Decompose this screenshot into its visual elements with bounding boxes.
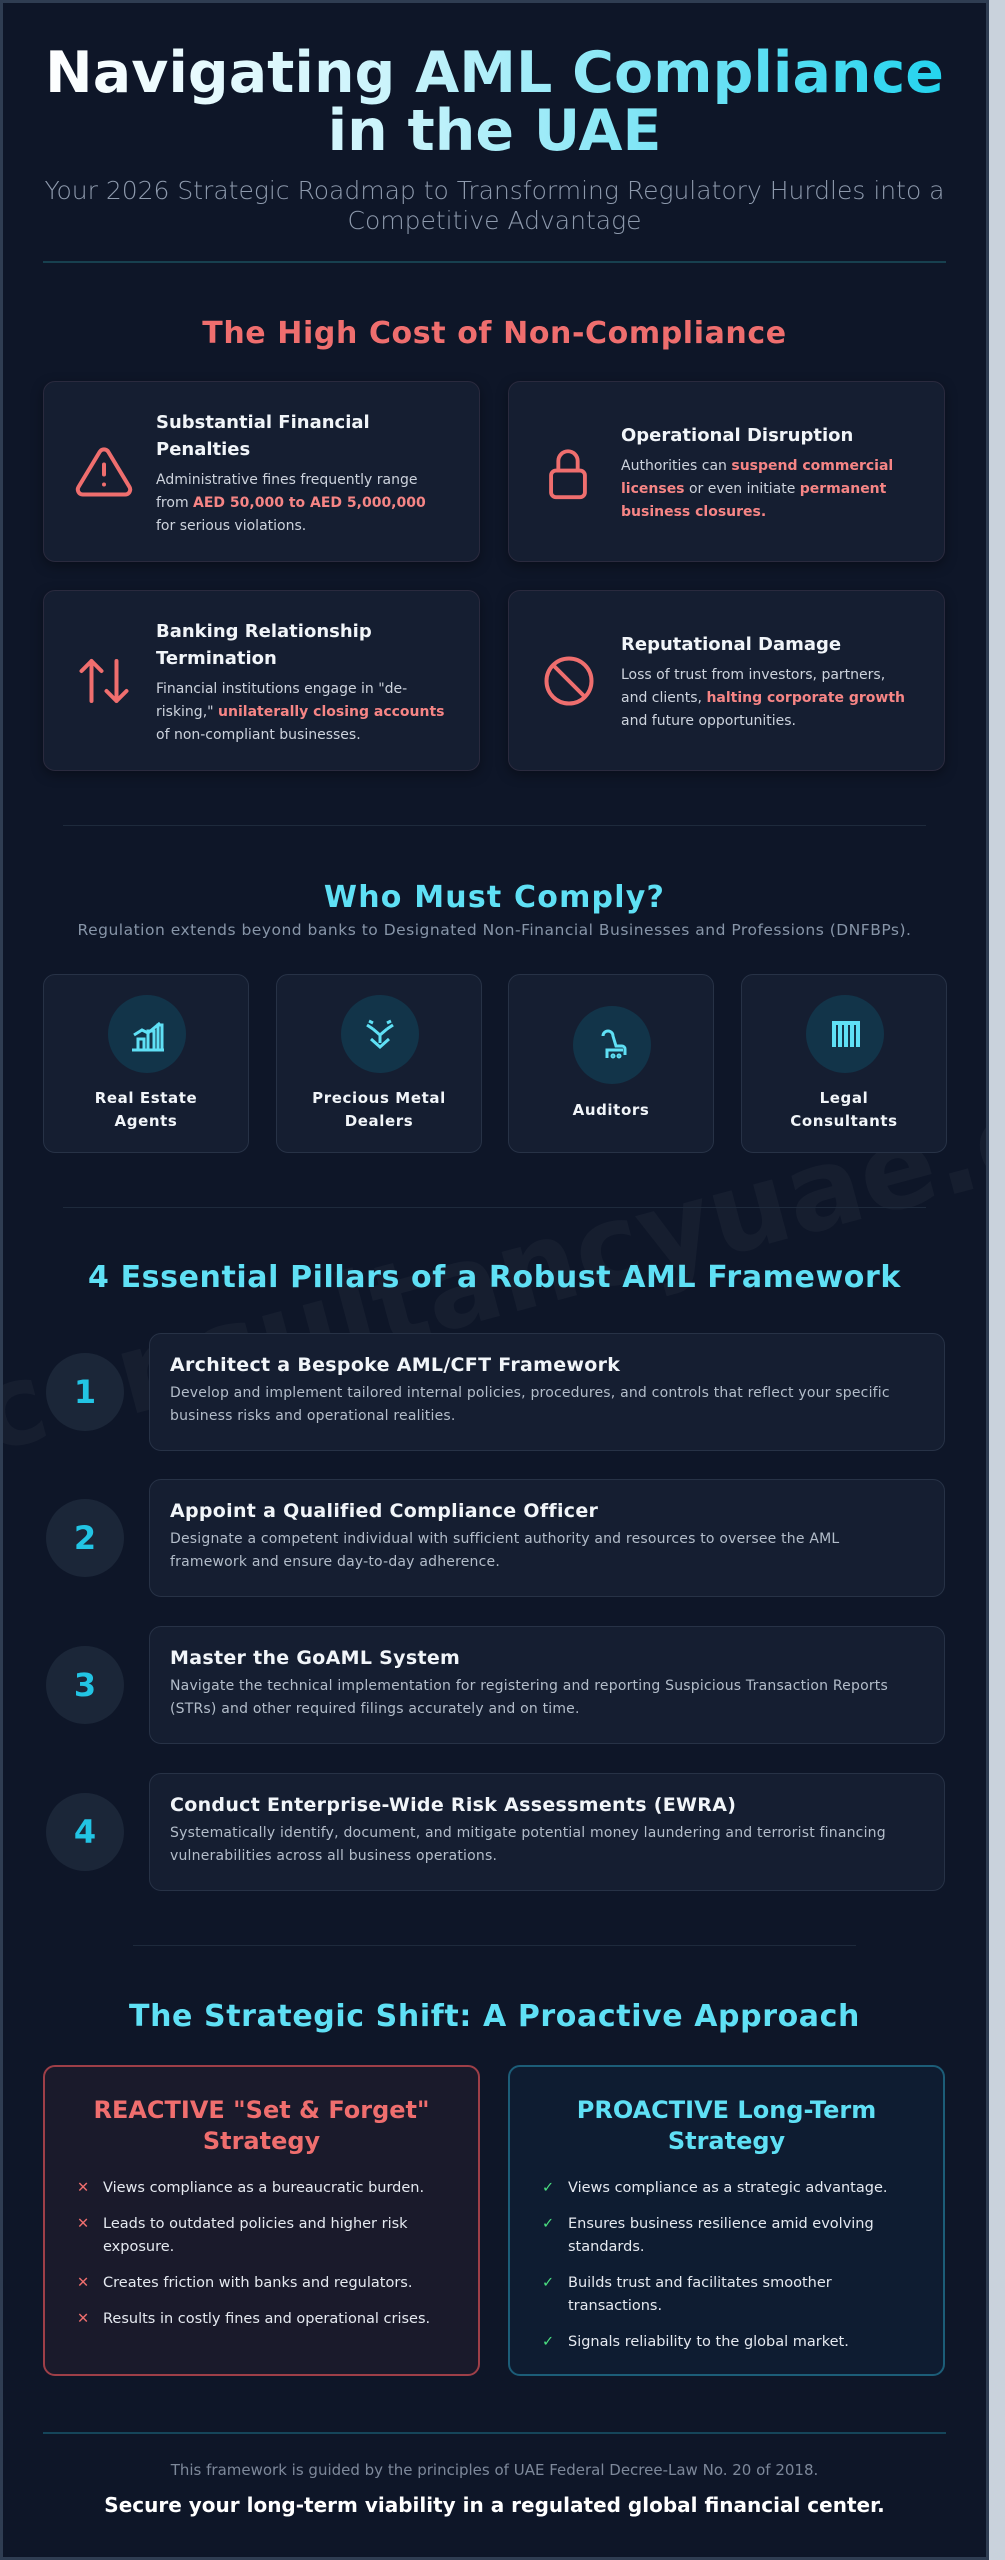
text: Loss of trust from investors, partners, and clients, halting corporate growth and future opportunities. [621,667,905,729]
pillar card 1: Develop and implement tailored internal policies, procedures, and controls that reflect your specific business risks and operational realities. [170,1385,890,1424]
card: legal: Consultants [790,1112,898,1130]
number circle 3: 3 [74,1666,96,1704]
card: precious metals: Dealers [345,1112,413,1130]
number circle 1 [46,1353,124,1431]
icon: arrows [79,658,129,704]
reactive list: Creates friction with banks and regulators. [103,2275,412,2291]
number circle 2 [46,1499,124,1577]
icon: warning [76,447,132,496]
proactive title: PROACTIVE Long-Term [577,2096,876,2124]
proactive list: Signals reliability to the global market. [568,2334,849,2350]
reactive list: ✕ [77,2180,89,2196]
number circle 4: 4 [74,1813,96,1851]
proactive list: Builds trust and facilitates smoother transactions. [568,2275,832,2314]
card: legal: Legal [820,1089,868,1107]
proactive list: ✓ [542,2334,554,2350]
card: real estate: Real Estate [95,1089,197,1107]
pillar card 1: Architect a Bespoke AML/CFT Framework [170,1354,620,1376]
card: real estate: Agents [115,1112,177,1130]
number circle 1: 1 [74,1373,96,1411]
reactive list: ✕ [77,2216,89,2232]
reactive list: Leads to outdated policies and higher risk exposure. [103,2216,408,2255]
number circle 2: 2 [74,1519,96,1557]
card: real estate [43,974,249,1153]
text [621,425,893,520]
pillar card 3: Master the GoAML System [170,1647,460,1669]
text [156,412,426,534]
text: Reputational Damage [621,634,841,655]
pillar card 4: Conduct Enterprise-Wide Risk Assessments (EWRA) [170,1794,736,1816]
card: precious metals [276,974,482,1153]
title: Navigating AML Compliance [45,40,944,106]
heading: who must comply: Who Must Comply? [324,880,665,915]
reactive list: ✕ [77,2311,89,2327]
pillar card 4: Systematically identify, document, and mitigate potential money laundering and terrorist financing vulnerabilities across all business operations. [170,1825,886,1864]
card: legal [741,974,947,1153]
heading: 4 pillars: 4 Essential Pillars of a Robust AML Framework [88,1260,901,1295]
proactive title: Strategy [668,2127,785,2155]
card: precious metals: Precious Metal [312,1089,446,1107]
reactive list: Results in costly fines and operational crises. [103,2311,430,2327]
reactive title: REACTIVE "Set & Forget" [93,2096,430,2124]
pillar card 2: Appoint a Qualified Compliance Officer [170,1500,598,1522]
text: Administrative fines frequently range from AED 50,000 to AED 5,000,000 for serious violations. [156,472,426,534]
pillar 3 [46,1626,945,1744]
title: in the UAE [328,98,661,164]
proactive list: Ensures business resilience amid evolving standards. [568,2216,874,2255]
title [45,40,944,164]
card: auditors [508,974,714,1153]
footer note: This framework is guided by the principles of UAE Federal Decree-Law No. 20 of 2018. [171,2461,818,2479]
proactive list: Views compliance as a strategic advantage. [568,2180,887,2196]
text: Substantial Financial Penalties [156,412,370,460]
icon: metals [341,995,419,1073]
pillar card 1 [149,1333,945,1451]
text [156,621,444,743]
number circle 3 [46,1646,124,1724]
pillar 4 [46,1773,945,1891]
text: Financial institutions engage in "de-risking," unilaterally closing accounts of non-compliant businesses. [156,681,444,743]
pillar card 4 [149,1773,945,1891]
subtitle: DNFBPs: Regulation extends beyond banks to Designated Non-Financial Businesses and Professions (DNFBPs). [78,921,911,939]
proactive list: ✓ [542,2275,554,2291]
subtitle: Your 2026 Strategic Roadmap to Transforming Regulatory Hurdles into a Competitive Advantage [44,176,944,235]
icon: pillars [806,995,884,1073]
reactive list: Views compliance as a bureaucratic burden. [103,2180,424,2196]
number circle 4 [46,1793,124,1871]
text [621,634,905,729]
pillar 2 [46,1479,945,1597]
pillar card 3: Navigate the technical implementation for registering and reporting Suspicious Transaction Reports (STRs) and other required filings accurately and on time. [170,1678,888,1717]
pillar card 3 [149,1626,945,1744]
pillar card 2 [149,1479,945,1597]
proactive list: ✓ [542,2180,554,2196]
icon: auditor [573,1006,651,1084]
panel: financial penalties [43,381,480,562]
icon: lock [549,449,587,500]
card: auditors: Auditors [573,1101,649,1119]
text: Banking Relationship Termination [156,621,372,669]
proactive title [577,2096,876,2155]
icon: building chart [108,995,186,1073]
pillar card 2: Designate a competent individual with sufficient authority and resources to oversee the AML framework and ensure day-to-day adherence. [170,1531,839,1570]
panel: banking termination [43,590,480,771]
reactive list [77,2180,430,2327]
heading: high cost: The High Cost of Non-Compliance [202,316,787,351]
reactive list: ✕ [77,2275,89,2291]
reactive title: Strategy [203,2127,320,2155]
heading: strategic shift: The Strategic Shift: A Proactive Approach [129,1999,860,2034]
panel: proactive [508,2065,945,2376]
icon: prohibited [544,656,594,706]
panel: operational disruption [508,381,945,562]
panel: reputational damage [508,590,945,771]
reactive title [93,2096,430,2155]
footer tagline: Secure your long-term viability in a regulated global financial center. [104,2493,885,2517]
panel: reactive [43,2065,480,2376]
proactive list: ✓ [542,2216,554,2232]
pillar 1 [46,1333,945,1451]
text: Operational Disruption [621,425,853,446]
proactive list [542,2180,887,2350]
text: Authorities can suspend commercial licenses or even initiate permanent business closures. [621,458,893,520]
